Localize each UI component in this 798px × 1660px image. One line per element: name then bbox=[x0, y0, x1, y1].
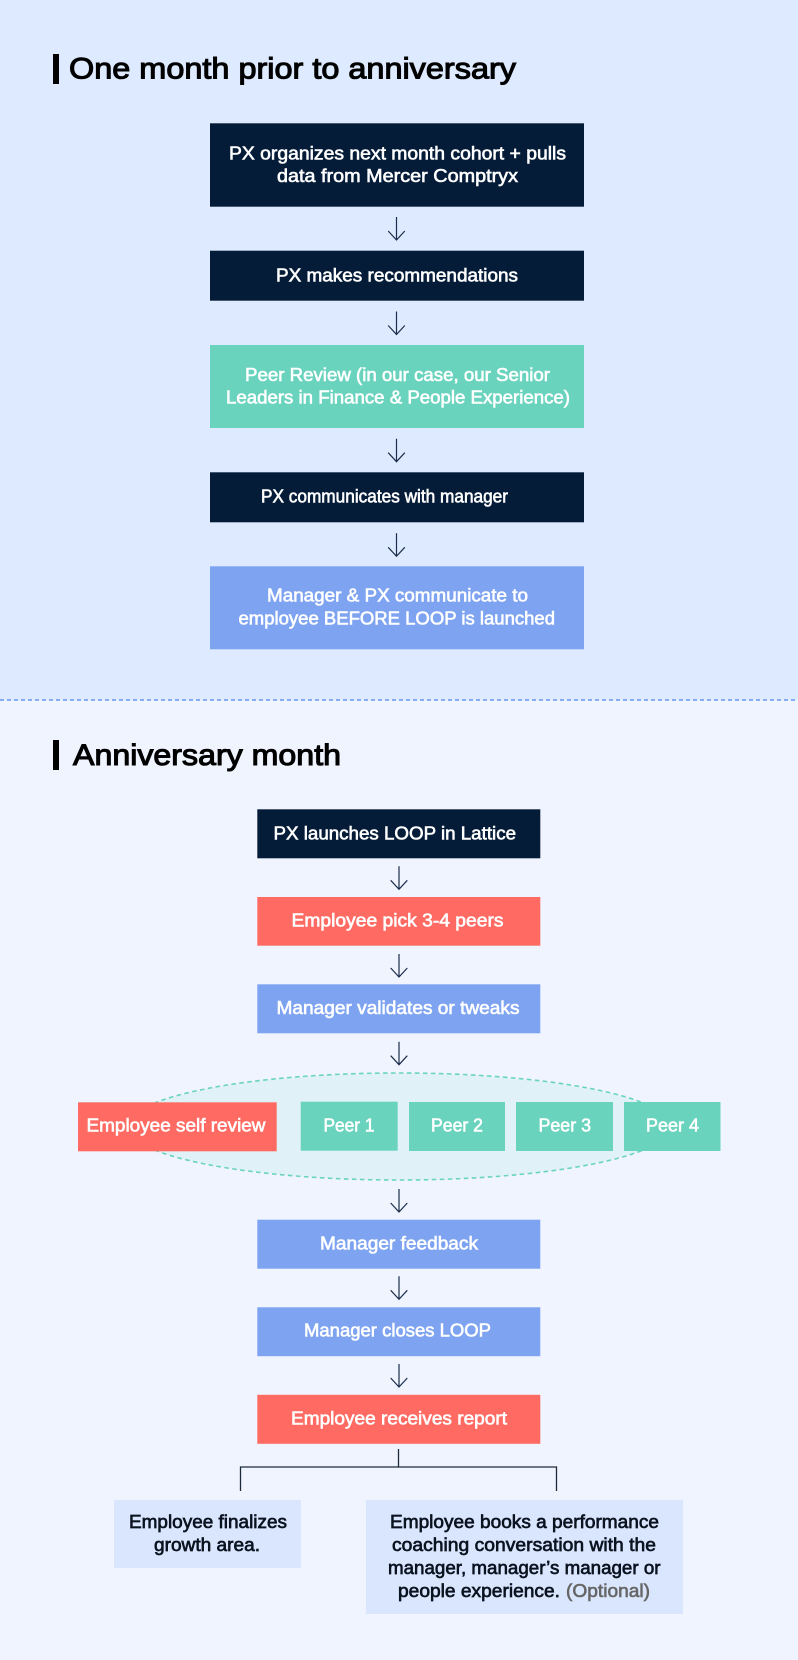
step: employee receives report bbox=[257, 1395, 540, 1444]
heading: anniversary month: Anniversary month bbox=[73, 739, 341, 772]
step: manager and PX communicate bbox=[210, 566, 584, 649]
step: manager and PX communicate: Manager & PX communicate to bbox=[267, 586, 528, 606]
step: manager validates bbox=[257, 984, 540, 1033]
arrow bbox=[391, 1189, 407, 1212]
peer 4: Peer 4 bbox=[646, 1116, 699, 1136]
outcome: finalizes growth area: Employee finalizes bbox=[129, 1512, 287, 1532]
arrow bbox=[388, 312, 405, 334]
peer 2 bbox=[409, 1102, 505, 1151]
outcome: performance coaching conversation bbox=[366, 1500, 683, 1614]
peer 2: Peer 2 bbox=[431, 1116, 483, 1136]
review group ellipse bbox=[127, 1073, 671, 1180]
step: PX makes recommendations: PX makes recommendations bbox=[276, 266, 518, 286]
step: employee receives report: Employee receives report bbox=[291, 1408, 507, 1428]
step: peer review: Peer Review (in our case, our Senior bbox=[245, 365, 550, 385]
step: employee self review: Employee self review bbox=[86, 1116, 267, 1136]
arrow bbox=[388, 439, 405, 462]
step: manager feedback bbox=[257, 1220, 540, 1269]
step: manager closes LOOP: Manager closes LOOP bbox=[304, 1321, 491, 1341]
step: employee self review bbox=[78, 1102, 277, 1151]
step: PX organizes cohort: PX organizes next month cohort + pulls bbox=[229, 143, 566, 163]
arrow bbox=[388, 533, 405, 556]
step: employee picks peers bbox=[257, 897, 540, 946]
peer 1 bbox=[301, 1102, 398, 1151]
step: manager feedback: Manager feedback bbox=[320, 1233, 479, 1253]
step: PX communicates with manager bbox=[210, 472, 584, 522]
branch connector bbox=[240, 1449, 556, 1491]
arrow bbox=[391, 1364, 407, 1387]
arrow bbox=[391, 954, 407, 977]
peer 3: Peer 3 bbox=[538, 1116, 591, 1136]
outcome: performance coaching conversation: (Optional) bbox=[566, 1581, 650, 1601]
arrow bbox=[391, 1042, 407, 1065]
step: PX communicates with manager: PX communicates with manager bbox=[261, 487, 508, 507]
step: manager and PX communicate: employee BEFORE LOOP is launched bbox=[238, 608, 555, 628]
peer 4 bbox=[624, 1102, 720, 1151]
step: peer review bbox=[210, 345, 584, 428]
outcome: finalizes growth area: growth area. bbox=[154, 1535, 260, 1555]
arrow bbox=[391, 866, 407, 889]
step: PX makes recommendations bbox=[210, 251, 584, 301]
step: PX launches LOOP bbox=[257, 809, 540, 858]
heading: one month prior to anniversary: One month prior to anniversary bbox=[69, 52, 516, 86]
peer 1: Peer 1 bbox=[324, 1116, 374, 1136]
step: manager validates: Manager validates or tweaks bbox=[276, 998, 520, 1018]
step: PX organizes cohort bbox=[210, 123, 584, 207]
step: employee picks peers: Employee pick 3-4 peers bbox=[292, 911, 504, 931]
outcome: finalizes growth area bbox=[114, 1500, 301, 1568]
outcome: performance coaching conversation: coaching conversation with the bbox=[392, 1535, 656, 1555]
step: PX launches LOOP: PX launches LOOP in Lattice bbox=[274, 823, 516, 843]
step: manager closes LOOP bbox=[257, 1307, 540, 1356]
step: peer review: Leaders in Finance & People Experience) bbox=[226, 388, 570, 408]
arrow bbox=[391, 1276, 407, 1299]
arrow bbox=[388, 217, 405, 240]
step: PX organizes cohort: data from Mercer Comptryx bbox=[277, 166, 518, 186]
peer 3 bbox=[516, 1102, 613, 1151]
outcome: performance coaching conversation: people experience. bbox=[398, 1581, 560, 1601]
outcome: performance coaching conversation: manager, manager’s manager or bbox=[388, 1558, 661, 1578]
outcome: performance coaching conversation: Employee books a performance bbox=[390, 1512, 659, 1532]
